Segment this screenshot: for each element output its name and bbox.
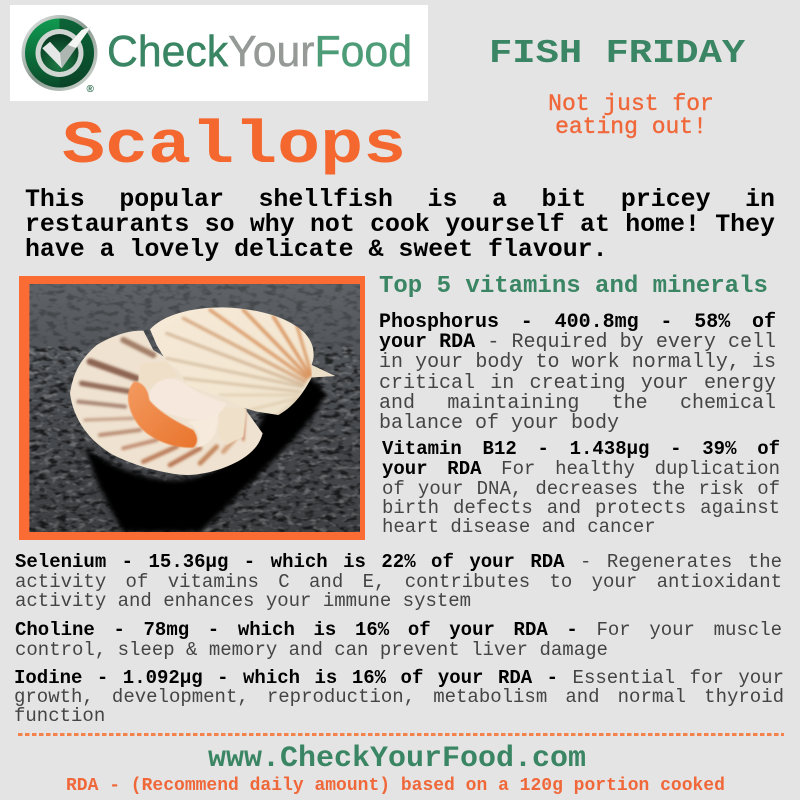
nutrient: Phosphorus: in your body to work normally, is xyxy=(379,351,776,374)
intro text xyxy=(25,186,775,264)
nutrient: Vitamin B12: Vitamin B12 - 1.438µg - 39% of xyxy=(382,438,780,460)
nutrient: Choline xyxy=(15,619,782,661)
nutrient: Phosphorus xyxy=(379,310,776,435)
heading: Fish Friday: FISH FRIDAY xyxy=(489,35,745,72)
icon: check mark badge xyxy=(22,15,98,95)
nutrient: Choline: control, sleep & memory and can prevent liver damage xyxy=(15,639,608,661)
nutrient: Phosphorus: balance of your body xyxy=(379,412,619,435)
nutrient: Phosphorus: critical in creating your energy xyxy=(379,372,776,394)
title: Scallops: Scallops xyxy=(62,113,406,181)
subheading: Not just for eating out: eating out! xyxy=(555,114,707,140)
scallop photo with orange frame xyxy=(19,276,365,540)
intro text: restaurants so why not cook yourself at home! They xyxy=(25,211,775,239)
shadow under shell xyxy=(85,377,327,532)
footnote: RDA definition: RDA - (Recommend daily amount) based on a 120g portion cooked xyxy=(66,776,725,796)
nutrient: Choline: Choline - 78mg - which is 16% of your RDA - For your muscle xyxy=(15,619,782,641)
logo wordmark: CheckYourFood xyxy=(107,27,412,76)
nutrient: Vitamin B12: heart disease and cancer xyxy=(382,516,656,538)
intro text: This popular shellfish is a bit pricey in xyxy=(25,186,775,214)
nutrient: Selenium xyxy=(15,551,782,612)
intro text: have a lovely delicate & sweet flavour. xyxy=(25,236,608,264)
nutrient: Vitamin B12: of your DNA, decreases the risk of xyxy=(382,478,780,500)
nutrient: Phosphorus: your RDA - Required by every cell xyxy=(379,331,776,354)
nutrient: Selenium: activity of vitamins C and E, contributes to your antioxidant xyxy=(15,571,782,593)
website URL: www.CheckYourFood.com xyxy=(208,742,586,776)
subheading: Not just for eating out: Not just for xyxy=(548,91,714,117)
nutrient: Vitamin B12: birth defects and protects against xyxy=(382,497,780,519)
logo panel xyxy=(10,5,428,101)
scallop meat and roe xyxy=(128,362,247,448)
subheading: Not just for eating out xyxy=(548,91,714,140)
nutrient: Selenium: Selenium - 15.36µg - which is 22% of your RDA - Regenerates the xyxy=(15,551,782,573)
icon: check mark badge: ® xyxy=(86,84,94,95)
nutrient: Vitamin B12: your RDA For healthy duplication xyxy=(382,458,780,480)
nutrient: Iodine: function xyxy=(14,705,105,727)
lower shell xyxy=(70,331,263,475)
nutrient: Iodine: Iodine - 1.092µg - which is 16% of your RDA - Essential for your xyxy=(14,667,784,689)
nutrient: Iodine: growth, development, reproduction, metabolism and normal thyroid xyxy=(14,686,784,708)
roe xyxy=(128,382,197,448)
heading: Top 5 vitamins and minerals: Top 5 vitamins and minerals xyxy=(379,273,768,300)
nutrient: Phosphorus: and maintaining the chemical xyxy=(379,392,776,415)
nutrient: Selenium: activity and enhances your immune system xyxy=(15,590,471,612)
nutrient: Phosphorus: Phosphorus - 400.8mg - 58% of xyxy=(379,310,776,334)
nutrient: Vitamin B12 xyxy=(382,438,780,538)
upper shell xyxy=(150,307,335,415)
nutrient: Iodine xyxy=(14,667,784,727)
